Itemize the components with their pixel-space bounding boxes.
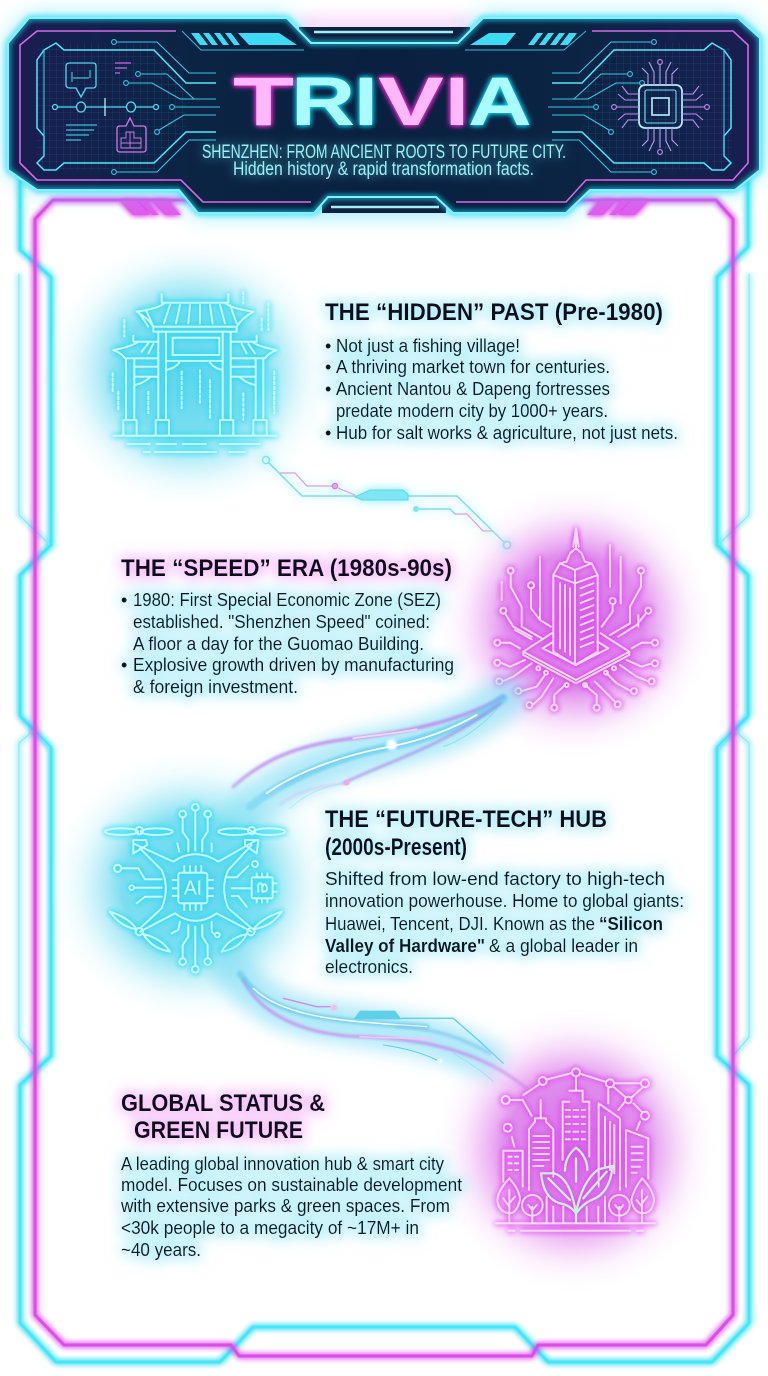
text: speed era bullets: Explosive growth driven by manufacturing: [133, 655, 454, 675]
icon: AI drone: [49, 750, 339, 1022]
text: hidden past bullets: [325, 336, 678, 443]
subtitle: SHENZHEN: FROM ANCIENT ROOTS TO FUTURE CITY.: [202, 142, 566, 163]
text: hidden past bullets: •: [325, 379, 331, 399]
connector: light stream 2: [233, 970, 527, 1088]
text: speed era bullets: A floor a day for the Guomao Building.: [133, 634, 424, 654]
heading: hidden past: THE “HIDDEN” PAST (Pre-1980): [325, 299, 663, 326]
icon: chip: [612, 60, 709, 154]
text: hidden past bullets: A thriving market town for centuries.: [336, 357, 610, 377]
text: hidden past bullets: Ancient Nantou & Dapeng fortresses: [336, 379, 610, 399]
text: global status body: <30k people to a megacity of ~17M+ in: [121, 1218, 419, 1238]
circuit traces left: [37, 40, 220, 174]
title: R: [291, 63, 355, 140]
text: future-tech hub body: & a global leader in: [489, 936, 638, 956]
heading: global status: GLOBAL STATUS &: [121, 1090, 325, 1117]
text: speed era bullets: [121, 590, 454, 697]
subtitle: [202, 142, 566, 180]
connector: circuit trace 1: [262, 456, 511, 549]
text: hidden past bullets: Not just a fishing village!: [336, 336, 520, 356]
text: hidden past bullets: predate modern city by 1000+ years.: [336, 401, 608, 421]
text: future-tech hub body: Huawei, Tencent, DJI. Known as the: [325, 914, 595, 934]
text: future-tech hub body: electronics.: [325, 957, 413, 977]
text: future-tech hub body: Valley of Hardware": [325, 936, 485, 956]
text: speed era bullets: •: [121, 655, 127, 675]
section 4: global status: [120, 1008, 717, 1292]
heading: future-tech hub: [325, 806, 607, 861]
icon: green city: [433, 1008, 717, 1292]
icon: tower chip: [437, 486, 713, 758]
text: hidden past bullets: Hub for salt works & agriculture, not just nets.: [336, 423, 678, 443]
text: hidden past bullets: •: [325, 357, 331, 377]
text: global status body: with extensive parks & green spaces. From: [120, 1196, 450, 1216]
title: [233, 62, 532, 140]
heading: global status: [121, 1090, 325, 1144]
text: global status body: model. Focuses on sustainable development: [121, 1175, 462, 1195]
text: future-tech hub body: innovation powerhouse. Home to global giants:: [325, 891, 684, 911]
text: future-tech hub body: Shifted from low-end factory to high-tech: [325, 869, 665, 889]
title: I: [354, 64, 378, 140]
header panel: [8, 18, 760, 213]
text: speed era bullets: established. "Shenzhen Speed" coined:: [133, 612, 430, 632]
header banner: [8, 14, 760, 213]
heading: future-tech hub: (2000s-Present): [325, 834, 467, 861]
text: future-tech hub body: “Silicon: [599, 914, 663, 934]
icon: gate: [45, 236, 335, 508]
text: future-tech hub body: [325, 869, 684, 977]
heading: future-tech hub: THE “FUTURE-TECH” HUB: [325, 806, 607, 833]
subtitle: Hidden history & rapid transformation facts.: [233, 159, 534, 180]
header glow: [8, 18, 760, 213]
section 1: hidden past: [45, 236, 678, 508]
text: hidden past bullets: •: [325, 423, 331, 443]
title: A: [468, 62, 532, 140]
text: hidden past bullets: •: [325, 336, 331, 356]
section 2: speed era: [121, 486, 713, 758]
section 3: future-tech hub: [49, 750, 684, 1022]
title: V: [378, 63, 444, 140]
text: speed era bullets: & foreign investment.: [133, 677, 298, 697]
inner magenta frame: [35, 200, 733, 1356]
text: global status body: ~40 years.: [121, 1240, 201, 1260]
text: global status body: A leading global innovation hub & smart city: [121, 1154, 444, 1174]
text: global status body: [120, 1154, 462, 1260]
title: T: [233, 63, 294, 140]
heading: global status: GREEN FUTURE: [134, 1117, 303, 1144]
heading: speed era: THE “SPEED” ERA (1980s-90s): [121, 555, 452, 582]
icon: AI drone: AI: [184, 878, 202, 900]
text: speed era bullets: •: [121, 590, 127, 610]
circuit traces right: [548, 40, 731, 174]
text: speed era bullets: 1980: First Special Economic Zone (SEZ): [133, 590, 441, 610]
icon: left timeline icons: [52, 63, 158, 152]
connector: light stream 1: [233, 697, 503, 808]
title: I: [445, 64, 469, 140]
